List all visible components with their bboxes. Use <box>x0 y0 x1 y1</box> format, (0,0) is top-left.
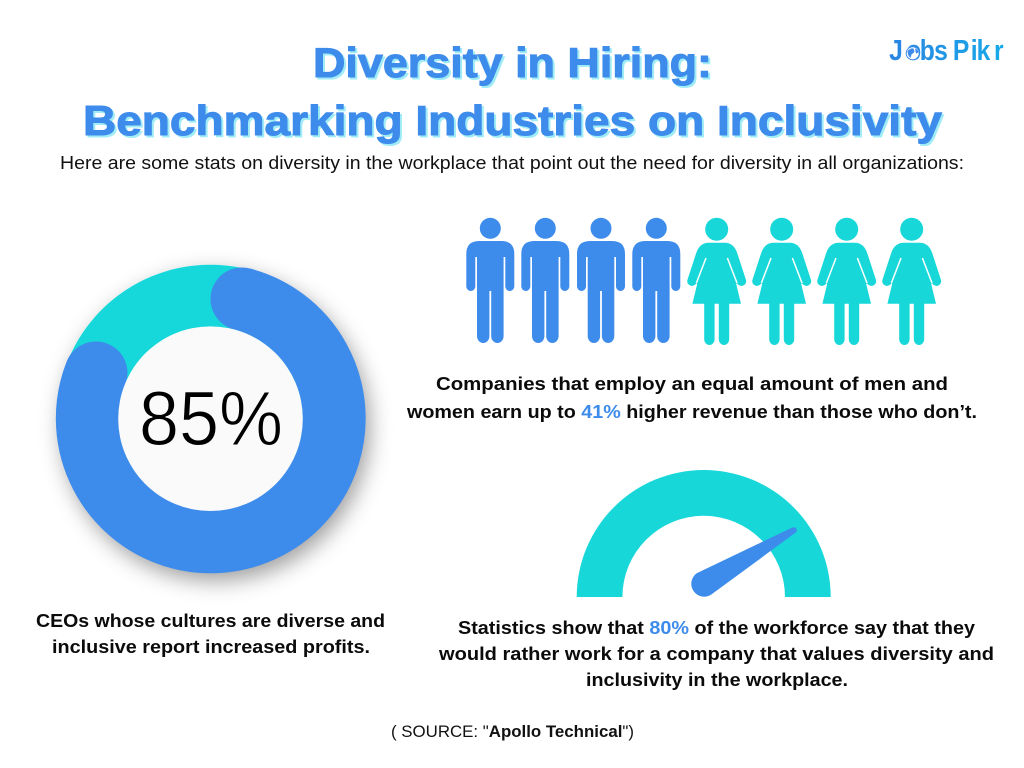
text: CEOs: inclusive report increased profits. <box>52 636 370 657</box>
text: equal employment revenue: women earn up to 41% higher revenue than those who don’t. <box>406 401 977 422</box>
donut chart: 85% <box>56 265 364 573</box>
title <box>83 39 945 146</box>
pictogram: four men and four women <box>466 218 941 345</box>
gauge chart <box>577 470 831 597</box>
men icons <box>466 218 680 343</box>
source: ( SOURCE: "Apollo Technical") <box>391 723 634 741</box>
gauge needle <box>691 527 797 597</box>
text: equal employment revenue: Companies that employ an equal amount of men and <box>436 373 948 394</box>
title: Benchmarking Industries on Inclusivity <box>83 97 943 144</box>
title: Diversity in Hiring: <box>313 39 712 86</box>
text: equal employment revenue <box>406 373 977 422</box>
text: CEOs <box>36 610 385 657</box>
donut value: 85% <box>139 376 283 462</box>
logo: JobsPikr: JobsPikr <box>889 34 1004 66</box>
title: Diversity in Hiring: <box>315 41 714 88</box>
women icons <box>687 218 941 345</box>
subtitle: Here are some stats on diversity in the workplace that point out the need for diversity in all organizations: <box>60 153 964 173</box>
text: CEOs: CEOs whose cultures are diverse and <box>36 610 385 631</box>
text: 80% of workforce: inclusivity in the workplace. <box>586 669 848 690</box>
text: 80% of workforce: Statistics show that 80% of the workforce say that they <box>458 617 976 638</box>
title: Benchmarking Industries on Inclusivity <box>85 99 945 146</box>
logo globe <box>906 47 919 60</box>
text: 80% of workforce: would rather work for a company that values diversity and <box>438 643 994 664</box>
text: 80% of workforce <box>438 617 994 690</box>
